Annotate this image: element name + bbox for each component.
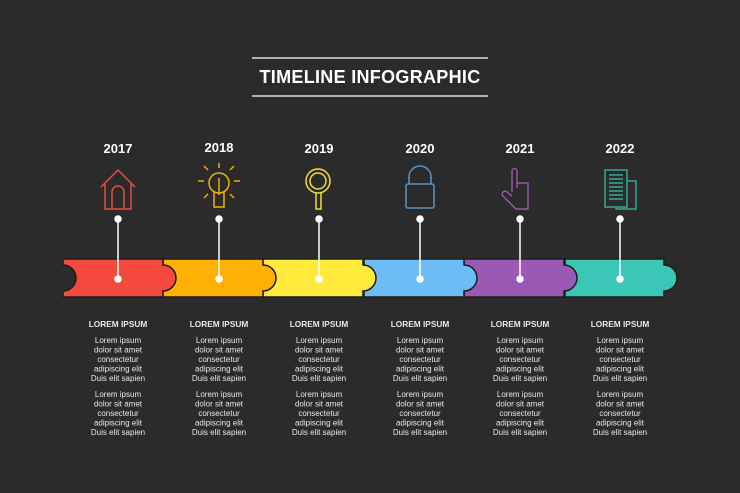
text headings: LOREM IPSUM — [391, 319, 449, 329]
text headings: LOREM IPSUM — [591, 319, 649, 329]
years: 2017 — [104, 141, 132, 156]
years: 2020 — [406, 141, 434, 156]
icon: house — [101, 170, 135, 209]
timeline bar — [63, 259, 677, 297]
text headings: LOREM IPSUM — [89, 319, 147, 329]
icon: magnifier — [306, 169, 330, 209]
years — [104, 140, 634, 156]
icon: hand — [502, 168, 528, 209]
years: 2022 — [606, 141, 634, 156]
text headings — [89, 319, 649, 329]
title: TIMELINE INFOGRAPHIC — [260, 67, 480, 87]
text blocks — [91, 336, 647, 437]
icon: documents — [605, 170, 636, 209]
icon: lock — [406, 166, 434, 208]
years: 2021 — [506, 141, 534, 156]
text headings: LOREM IPSUM — [491, 319, 549, 329]
text headings: LOREM IPSUM — [190, 319, 248, 329]
years: 2018 — [205, 140, 233, 155]
icon: bulb — [198, 163, 240, 207]
text headings: LOREM IPSUM — [290, 319, 348, 329]
years: 2019 — [305, 141, 333, 156]
connectors — [115, 216, 623, 282]
